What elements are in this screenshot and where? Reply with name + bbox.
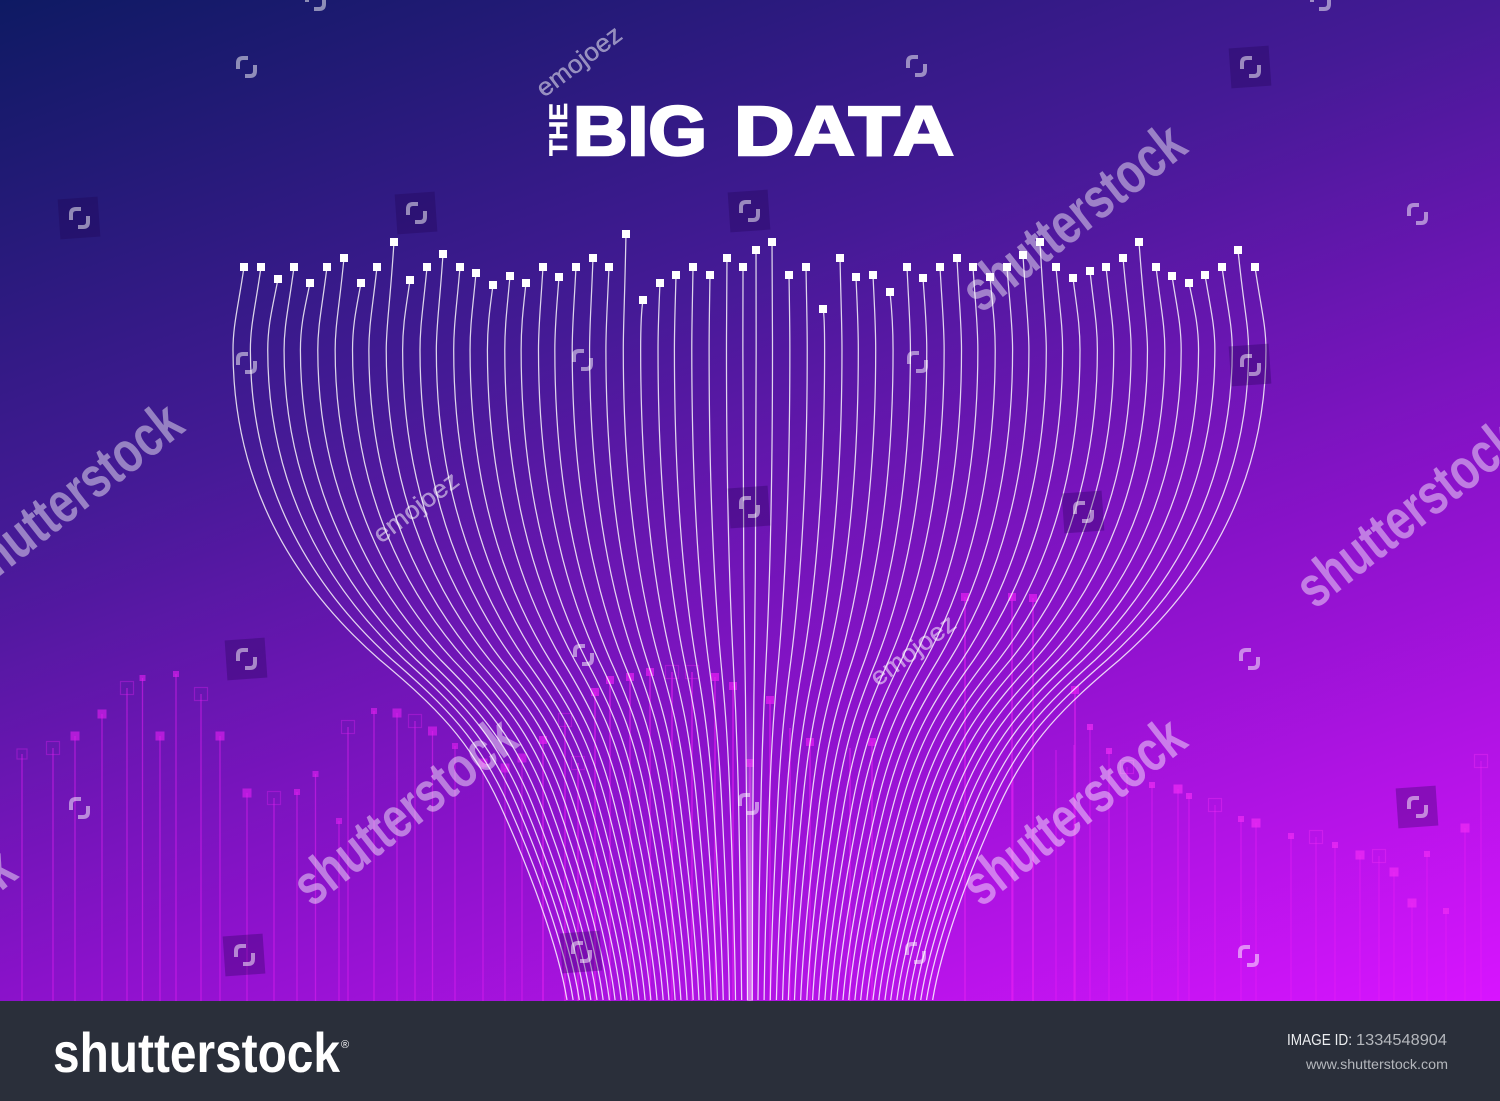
title: THE BIG DATA: BIG	[573, 92, 707, 170]
website url: www.shutterstock.com	[1305, 1056, 1448, 1072]
emojoez watermarks: emojoez	[368, 466, 464, 549]
bright central band of the funnel	[747, 690, 753, 1001]
white square data markers	[240, 230, 1259, 313]
footer logo: ®	[341, 1039, 349, 1051]
shutterstock diagonal watermarks: shutterstock	[280, 704, 529, 918]
emojoez watermarks: emojoez	[865, 609, 961, 692]
emojoez watermarks: emojoez	[531, 20, 627, 103]
centre background data bars	[539, 593, 1079, 1001]
emojoez watermarks	[368, 20, 961, 692]
left background data bars	[17, 671, 526, 1001]
right background data bars	[1013, 724, 1488, 1001]
image id: 1334548904	[1356, 1032, 1447, 1049]
funnel of converging data lines	[233, 234, 1266, 1000]
image id	[1287, 1032, 1447, 1049]
image id: IMAGE ID:	[1287, 1032, 1352, 1049]
shutterstock corner icons on dark squares	[58, 46, 1438, 976]
shutterstock diagonal watermarks: shutterstock	[949, 704, 1198, 918]
title: THE BIG DATA	[545, 92, 954, 170]
title: THE BIG DATA: DATA	[734, 92, 954, 170]
footer logo: shutterstock	[53, 1021, 341, 1084]
footer bar	[0, 1001, 1500, 1101]
shutterstock corner icons, plain	[71, 0, 1426, 965]
shutterstock diagonal watermarks: shutterstock	[949, 110, 1198, 324]
title: THE BIG DATA: THE	[545, 103, 573, 156]
